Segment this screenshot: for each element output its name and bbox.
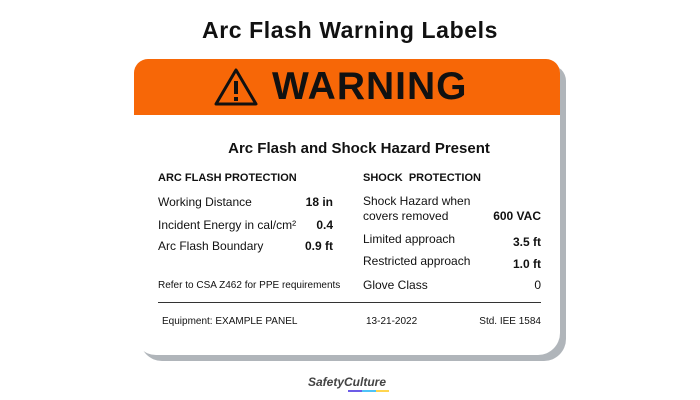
right column: shock protection: Glove Class	[363, 278, 428, 292]
left column: arc flash protection: 0.4	[316, 218, 333, 232]
footer: Std. IEE 1584	[479, 316, 541, 327]
right column: shock protection	[363, 172, 541, 292]
left column: arc flash protection: ARC FLASH PROTECTION	[158, 172, 297, 184]
left column: arc flash protection: Arc Flash Boundary	[158, 239, 263, 253]
right column: shock protection: SHOCK PROTECTION	[363, 172, 481, 184]
left column: arc flash protection: Refer to CSA Z462 for PPE requirements	[158, 280, 340, 291]
right column: shock protection: 1.0 ft	[513, 257, 541, 271]
warning banner	[134, 59, 560, 115]
logo: SafetyCulture	[308, 375, 386, 389]
right column: shock protection: Restricted approach	[363, 254, 470, 268]
icon: warning triangle	[214, 68, 258, 106]
right column: shock protection: 0	[534, 278, 541, 292]
left column: arc flash protection: 18 in	[306, 195, 333, 209]
left column: arc flash protection: 0.9 ft	[305, 239, 333, 253]
banner text: WARNING	[272, 65, 468, 108]
right column: shock protection: 3.5 ft	[513, 235, 541, 249]
card shadow	[140, 65, 566, 361]
left column: arc flash protection	[158, 172, 340, 291]
subtitle: Arc Flash and Shock Hazard Present	[228, 140, 490, 157]
right column: shock protection: Shock Hazard when	[363, 194, 470, 208]
footer: 13-21-2022	[366, 316, 417, 327]
left column: arc flash protection: Incident Energy in cal/cm²	[158, 218, 296, 232]
footer	[162, 316, 541, 327]
title: Arc Flash Warning Labels	[202, 17, 498, 43]
left column: arc flash protection: Working Distance	[158, 195, 252, 209]
footer: Equipment: EXAMPLE PANEL	[162, 316, 297, 327]
right column: shock protection: Limited approach	[363, 232, 455, 246]
panel: warning label	[134, 59, 560, 355]
right column: shock protection: covers removed	[363, 209, 448, 223]
right column: shock protection: 600 VAC	[493, 209, 541, 223]
